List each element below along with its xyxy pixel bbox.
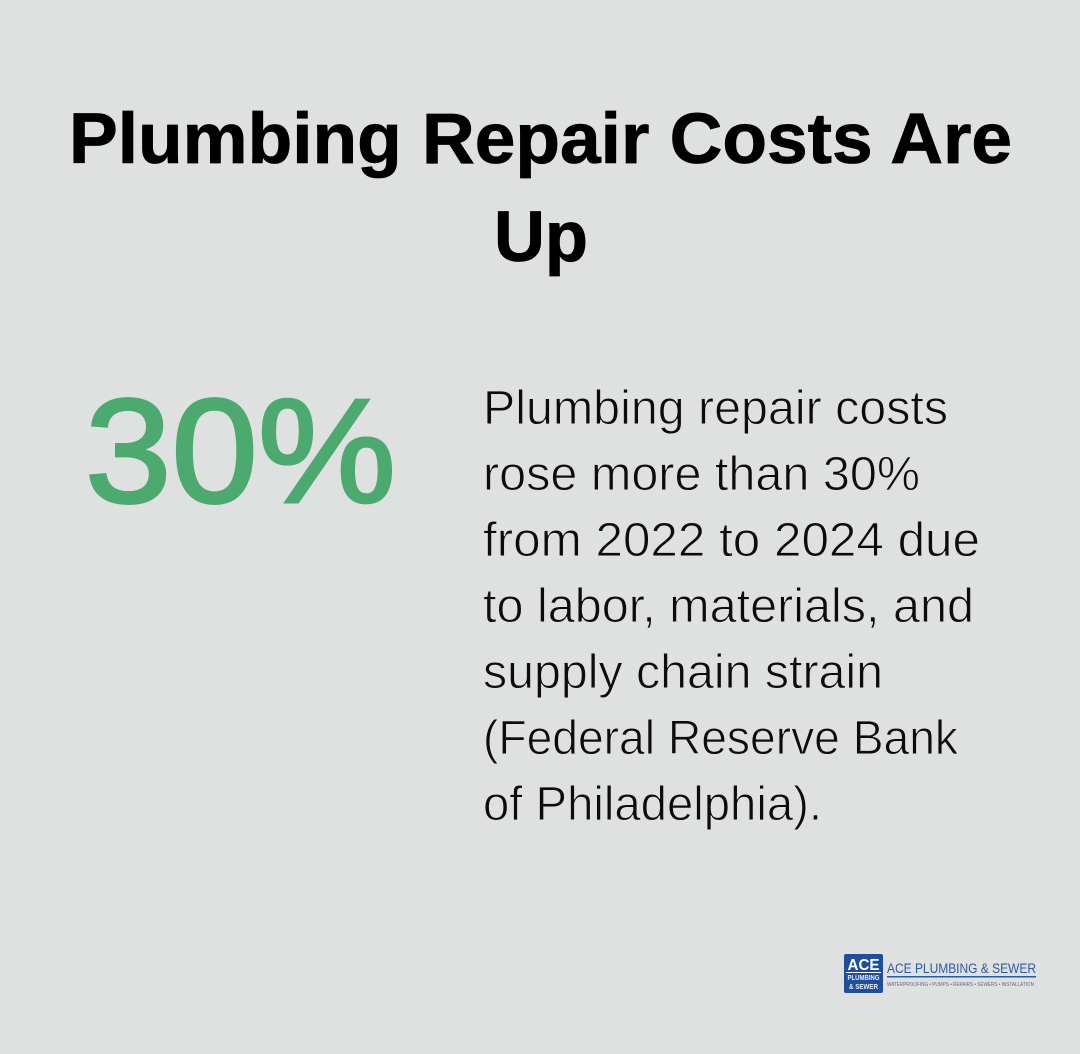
logo badge: & SEWER bbox=[849, 984, 878, 991]
logo badge: ACE bbox=[848, 957, 880, 974]
description text: to labor, materials, and bbox=[483, 580, 974, 633]
description text: rose more than 30% bbox=[483, 448, 920, 501]
logo tagline: WATERPROOFING • PUMPS • REPAIRS • SEWERS • INSTALLATION bbox=[887, 982, 1034, 988]
logo wordmark: ACE PLUMBING & SEWER bbox=[887, 961, 1036, 976]
title bbox=[69, 100, 1012, 277]
logo badge bbox=[844, 954, 883, 993]
logo: Ace Plumbing & Sewer bbox=[844, 954, 1036, 993]
logo badge: PLUMBING bbox=[848, 975, 880, 982]
description text bbox=[483, 382, 980, 831]
description text: Plumbing repair costs bbox=[483, 382, 948, 435]
description text: of Philadelphia). bbox=[483, 778, 822, 831]
big stat: 30%: 30% bbox=[85, 369, 396, 534]
description text: supply chain strain bbox=[483, 646, 883, 699]
title: Plumbing Repair Costs Are bbox=[69, 100, 1012, 179]
description text: from 2022 to 2024 due bbox=[483, 514, 980, 567]
title: Up bbox=[494, 198, 588, 277]
description text: (Federal Reserve Bank bbox=[483, 712, 959, 765]
